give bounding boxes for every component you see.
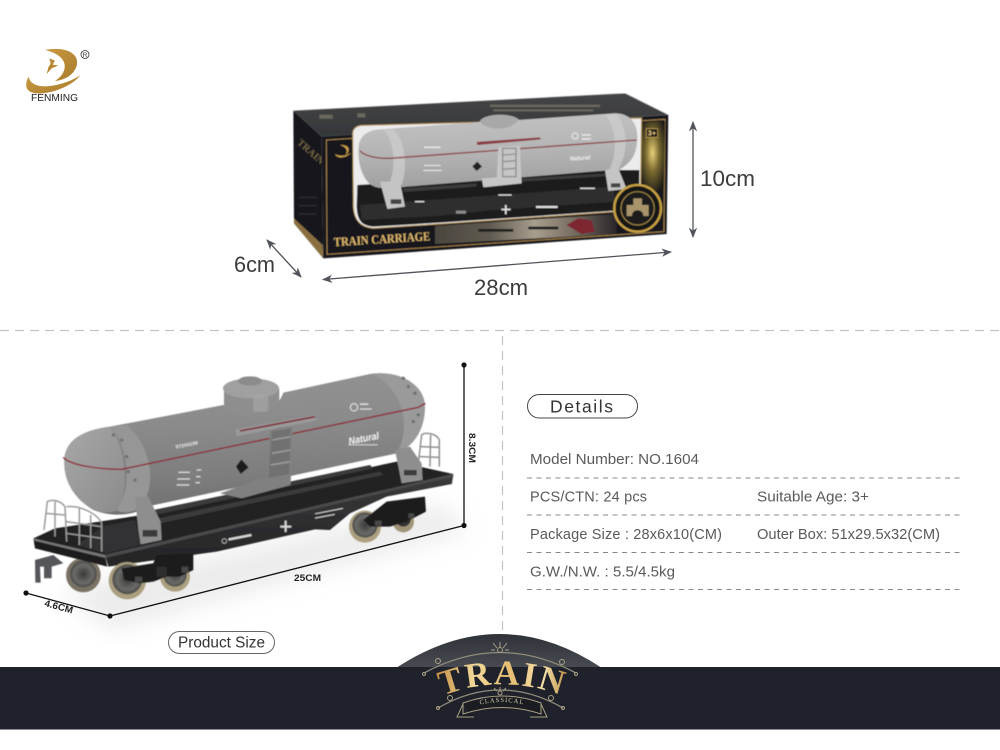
brand name: FENMING: [31, 92, 78, 104]
tank in window: [358, 113, 637, 209]
box top markings: [319, 105, 600, 119]
right end band: [373, 373, 425, 453]
box front face: [322, 115, 668, 258]
sill markings: [222, 508, 343, 543]
dome: [223, 376, 279, 415]
left railing: [44, 500, 102, 552]
tank markings: [423, 133, 591, 171]
red band: [360, 140, 637, 158]
footer band: [0, 667, 1000, 730]
hazard diamond: [236, 459, 249, 474]
end beam highlight: [33, 538, 106, 558]
box top face: [293, 93, 668, 137]
horizontal dashed divider: [0, 330, 1000, 332]
wagon deck: [33, 462, 453, 555]
product window: [353, 118, 642, 228]
weight: G.W./N.W. : 5.5/4.5kg: [530, 564, 675, 580]
ribbon: [457, 696, 547, 717]
hazard diamond: [472, 162, 482, 171]
Natural label: Natural: [570, 155, 591, 163]
sun ornaments: [491, 642, 509, 695]
end beam: [33, 538, 107, 567]
train soft shadow: [60, 505, 470, 630]
handrail: [235, 415, 316, 436]
center saddle and ladder: [482, 145, 522, 187]
suitable age: Suitable Age: 3+: [757, 490, 869, 506]
footer arch: [396, 634, 602, 668]
model number: Model Number: NO.1604: [530, 452, 699, 468]
Details pill: [528, 394, 638, 418]
arrow: box length 28cm: [323, 252, 671, 280]
red band: [63, 403, 425, 469]
tank left end cap: [64, 427, 125, 513]
right saddle: [395, 447, 423, 483]
label: 28cm: 28cm: [474, 275, 528, 300]
photo strip: [435, 214, 617, 244]
brand logo: FENMING: [26, 49, 89, 104]
right artwork panel: [640, 121, 665, 192]
rivets: [112, 377, 420, 482]
arrow: box height 10cm: [692, 122, 694, 237]
handrail: [477, 137, 541, 145]
tank wagon product photo: [33, 373, 453, 599]
front gold border: [326, 119, 665, 254]
registered mark: R: [83, 52, 88, 59]
footer TRAIN CLASSICAL emblem: [422, 642, 578, 718]
sill top highlight: [105, 474, 453, 558]
near truck: [109, 553, 193, 599]
Product Size pill: [168, 632, 274, 654]
dimension lines for wagon: [23, 362, 467, 619]
side sill: [105, 474, 453, 567]
package box product photo: [293, 93, 668, 258]
center saddle with ladder: [220, 427, 293, 498]
end bands: [383, 129, 405, 185]
tank code label: 97204196: [175, 440, 199, 451]
label: 4.6CM: 4.6CM: [43, 598, 74, 616]
deck ribs: [153, 465, 383, 523]
left deck plate: [77, 520, 141, 553]
right saddle: [605, 168, 627, 191]
ornament end knots: [422, 658, 578, 710]
label: 10cm: 10cm: [700, 166, 755, 191]
box left side face: TRAIN: [295, 137, 327, 168]
tank data marks: [177, 403, 378, 486]
ornament arcs: [424, 652, 576, 708]
medallion emblem: [614, 185, 661, 232]
train chassis in window: [357, 170, 639, 227]
coupler: [35, 555, 63, 583]
arrow: box depth 6cm: [267, 240, 301, 277]
Details pill: Details: [550, 396, 613, 416]
package size: Package Size : 28x6x10(CM): [530, 527, 722, 543]
red detail in strip: [567, 218, 595, 234]
details table: [527, 452, 964, 590]
box left side face: [293, 111, 327, 258]
left saddle: [380, 182, 405, 209]
logo crescent mark: [26, 49, 81, 93]
label: 25CM: 25CM: [294, 573, 321, 584]
TRAIN lettering: TRAIN: [436, 661, 567, 694]
label: 6cm: 6cm: [234, 252, 275, 277]
left end band: [110, 425, 150, 512]
age badge 3+: 3+: [648, 129, 656, 138]
far truck: [349, 497, 426, 543]
front small logo: [335, 145, 351, 157]
chassis markings: [415, 188, 595, 214]
left saddle: [135, 497, 162, 544]
tank body: [64, 373, 425, 515]
Product Size pill: Product Size: [178, 634, 265, 652]
strip captions: [478, 227, 558, 232]
TRAIN CARRIAGE title: TRAIN CARRIAGE: [333, 229, 431, 249]
Natural label: Natural: [348, 431, 380, 448]
outer box: Outer Box: 51x29.5x32(CM): [757, 527, 940, 543]
CLASSICAL lettering: CLASSICAL: [480, 698, 523, 704]
label: 8.3CM: 8.3CM: [466, 433, 477, 463]
far wheels: [66, 511, 414, 592]
right railing: [418, 433, 439, 467]
pieces per carton: PCS/CTN: 24 pcs: [530, 490, 647, 506]
vertical dashed divider: [502, 336, 504, 666]
